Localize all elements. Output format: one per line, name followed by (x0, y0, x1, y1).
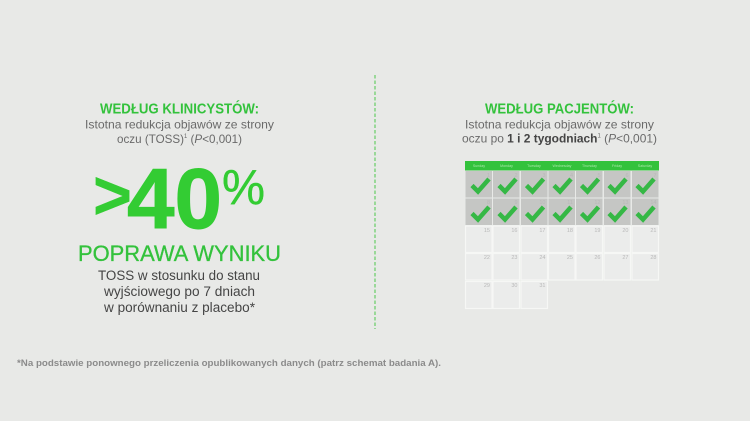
text: TOSS reduction line 2: P<0,001) (194, 132, 243, 146)
panel: patients (462, 100, 659, 308)
day numbers: 4 (570, 173, 573, 179)
calendar header (465, 161, 659, 170)
day numbers: 31 (539, 283, 546, 289)
empty days: weeks 3 to 5 (466, 226, 658, 308)
day numbers: 25 (567, 255, 573, 261)
day numbers: 21 (650, 228, 656, 234)
calendar header: Wednesday (553, 164, 572, 168)
day numbers: 9 (514, 200, 518, 206)
text: TOSS compared to baseline: TOSS w stosunku do stanu (98, 268, 260, 283)
text: patient reduction line 2: ( (601, 132, 608, 146)
heading: patients: WEDŁUG PACJENTÓW: (485, 100, 634, 118)
day numbers: 30 (511, 283, 518, 289)
text: patient reduction line 2: P<0,001) (608, 132, 657, 146)
day numbers: 8 (487, 200, 490, 206)
calendar header: Thursday (582, 164, 597, 168)
day numbers: 24 (539, 255, 546, 261)
day numbers: 23 (511, 255, 518, 261)
percent sign: % (222, 161, 265, 215)
day numbers: 18 (567, 228, 573, 234)
text: TOSS reduction line 2: ( (187, 132, 194, 146)
text: TOSS compared to baseline: w porównaniu z placebo* (103, 300, 256, 315)
text: TOSS reduction line 1: Istotna redukcja objawów ze strony (85, 118, 274, 132)
day numbers: 26 (594, 255, 600, 261)
big number: more than 40: 40 (127, 152, 222, 247)
day numbers: 13 (622, 200, 628, 206)
icons: green check marks (472, 179, 654, 220)
footnote: *Na podstawie ponownego przeliczenia opublikowanych danych (patrz schemat badania A). (17, 358, 441, 369)
day numbers: 22 (484, 255, 490, 261)
heading: clinicians: WEDŁUG KLINICYSTÓW: (100, 100, 259, 118)
heading: score improvement: POPRAWA WYNIKU (78, 241, 281, 266)
text: TOSS compared to baseline (98, 268, 260, 315)
big number: more than 40: > (93, 156, 132, 234)
center divider (374, 75, 376, 329)
text: TOSS compared to baseline: wyjściowego po 7 dniach (103, 284, 255, 299)
calendar (465, 161, 659, 308)
day numbers: 1 (487, 173, 490, 179)
day numbers: 16 (511, 228, 518, 234)
day numbers: 2 (514, 173, 518, 179)
day numbers: 15 (484, 228, 490, 234)
day numbers: 17 (539, 228, 546, 234)
checked days: weeks 1 and 2 (466, 171, 658, 225)
day numbers: 19 (594, 228, 600, 234)
calendar header: Sunday (473, 164, 485, 168)
panel: clinicians (78, 100, 281, 315)
calendar header: Monday (500, 164, 513, 168)
day numbers: 11 (567, 200, 573, 206)
day numbers: 29 (484, 283, 490, 289)
text: TOSS reduction line 2: oczu (TOSS) (117, 132, 186, 146)
text: patient reduction line 1: Istotna redukcja objawów ze strony (465, 118, 654, 132)
day numbers: 28 (650, 255, 656, 261)
day numbers: 5 (597, 173, 600, 179)
calendar header: Tuesday (527, 164, 541, 168)
day numbers: 10 (539, 200, 546, 206)
day numbers: 27 (622, 255, 628, 261)
text: TOSS reduction line 2: 1 (184, 134, 188, 140)
calendar header: Friday (612, 164, 622, 168)
text: patient reduction line 2: 1 (597, 134, 601, 140)
day numbers: 20 (622, 228, 628, 234)
calendar header: Saturday (638, 164, 652, 168)
day numbers: 12 (594, 200, 600, 206)
day numbers: 7 (653, 173, 656, 179)
text: patient reduction line 2: oczu po 1 i 2 tygodniach (462, 132, 598, 146)
day numbers: 3 (542, 173, 546, 179)
day numbers: 14 (650, 200, 656, 206)
day numbers: 6 (625, 173, 628, 179)
day numbers (484, 173, 656, 289)
